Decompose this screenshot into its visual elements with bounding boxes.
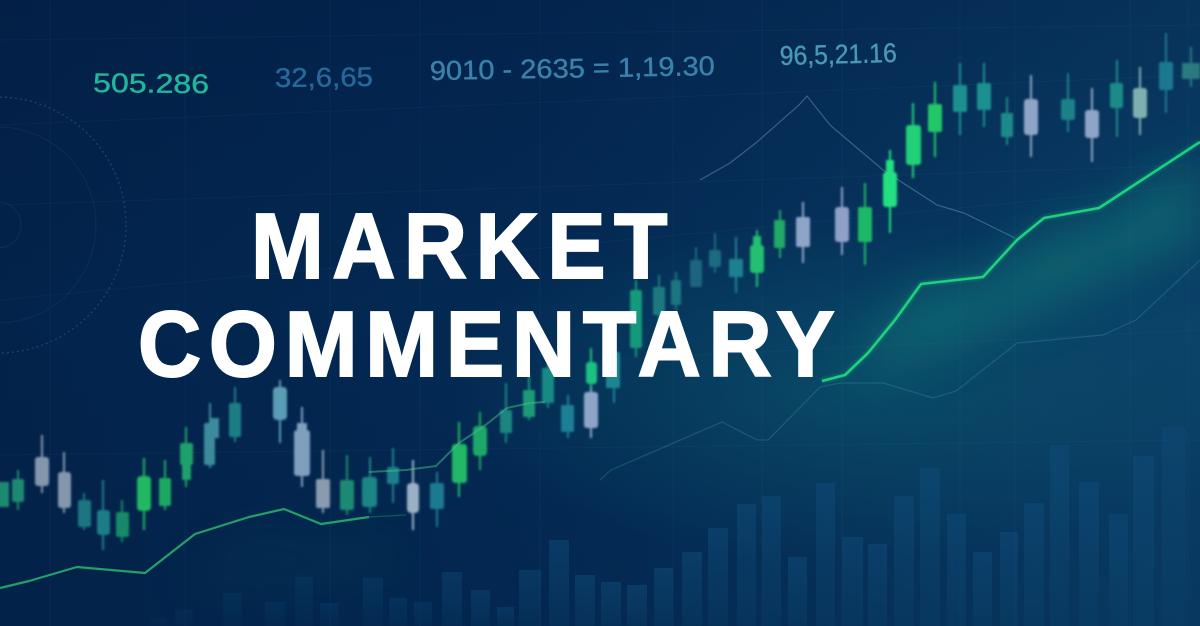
faint secondary line	[600, 260, 1200, 480]
thin grey line	[700, 96, 1015, 238]
ticker: formula: 9010 - 2635 = 1,19.30	[430, 51, 715, 86]
ticker: 32,6,65: 32,6,65	[275, 62, 373, 93]
candlesticks right	[653, 33, 1200, 325]
ticker: 96,5,21.16: 96,5,21.16	[779, 38, 897, 71]
ticker: 505.286: 505.286	[93, 68, 209, 99]
title line: COMMENTARY: COMMENTARY	[138, 293, 835, 397]
green trend line left	[0, 402, 545, 588]
green area glow	[170, 155, 1200, 590]
title line: MARKET: MARKET	[251, 195, 667, 299]
candlesticks left	[0, 280, 642, 550]
ticker numbers	[93, 38, 897, 99]
green trend line right	[822, 142, 1200, 381]
title	[138, 195, 835, 397]
volume bars	[150, 427, 1186, 626]
concentric radar circles	[0, 97, 126, 353]
